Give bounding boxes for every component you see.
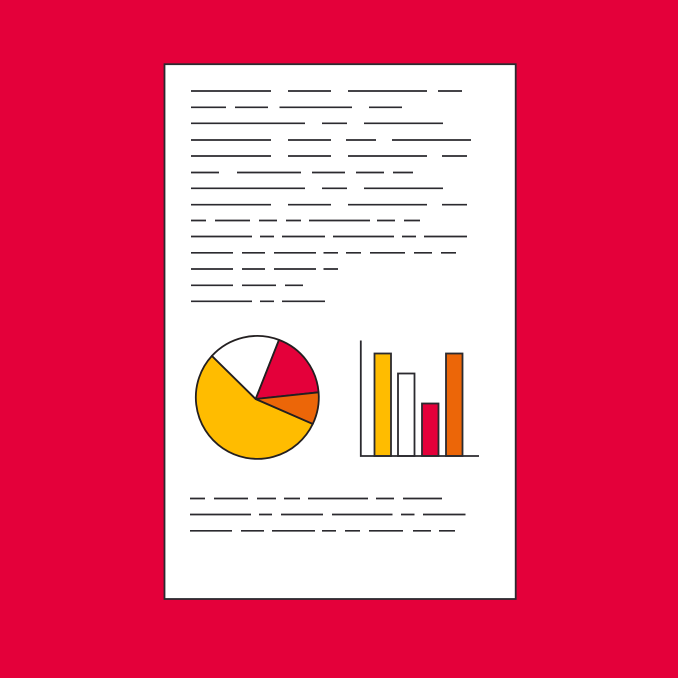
bar: orange: [446, 354, 462, 456]
bar chart: [361, 340, 479, 456]
bar: white: [398, 374, 414, 456]
bar: red: [422, 404, 438, 456]
slice: white: [212, 336, 279, 399]
slice: orange: [256, 392, 319, 424]
slice: yellow: [196, 356, 313, 459]
text block: main body lines: [191, 91, 471, 301]
pie chart: [196, 336, 319, 459]
text block: lower body lines: [190, 498, 466, 531]
panel: document page: [164, 64, 516, 599]
slice: red: [256, 340, 319, 399]
chart axes: [361, 340, 479, 456]
bar: yellow: [374, 354, 391, 456]
